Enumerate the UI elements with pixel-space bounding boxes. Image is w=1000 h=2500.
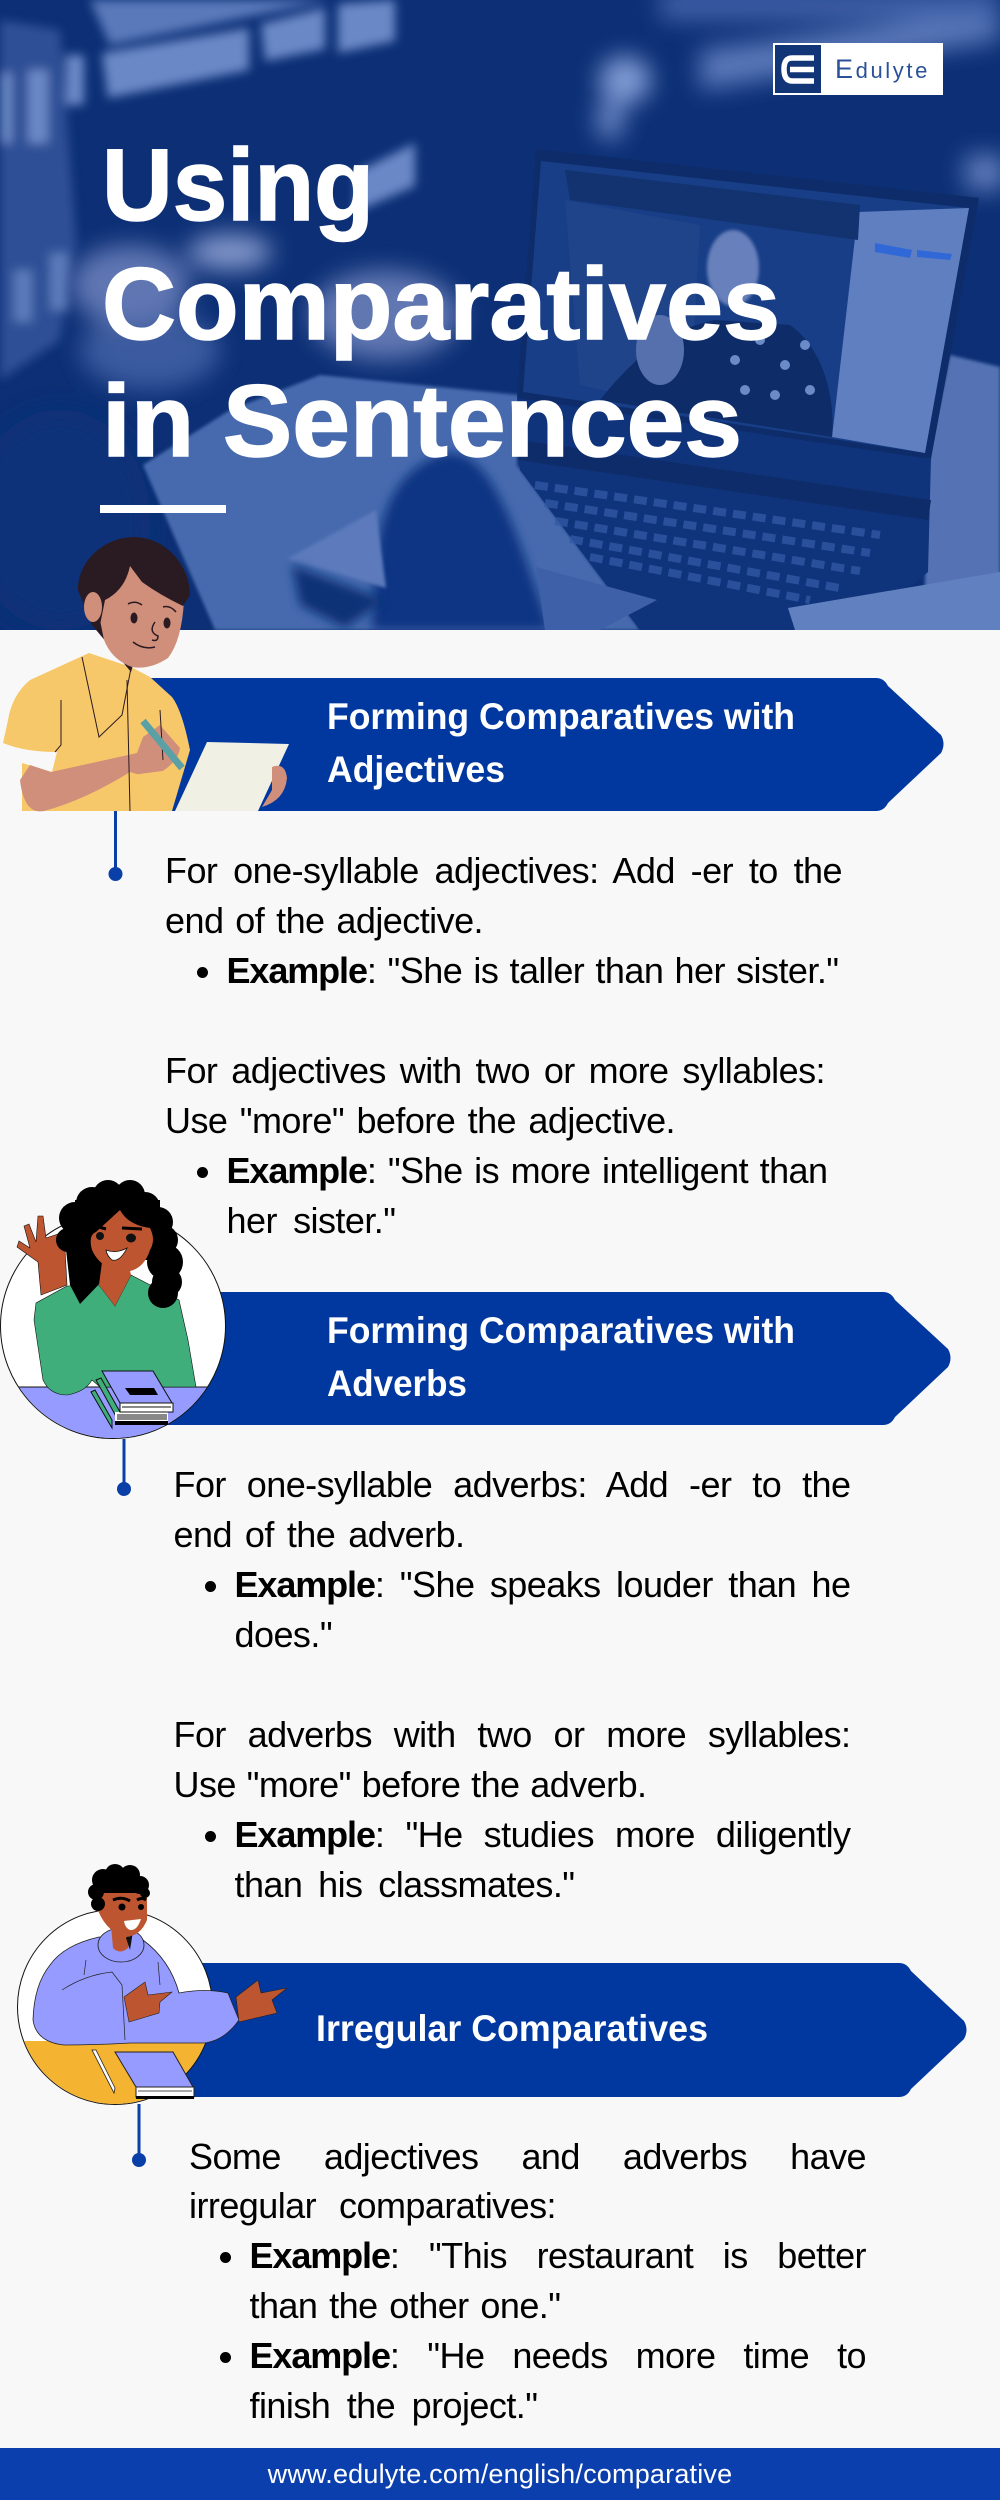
title: Using [102, 128, 374, 242]
head [92, 615, 136, 672]
connector 2 [117, 1439, 131, 1496]
title: in Sentences [102, 364, 742, 478]
text: finish the project." [250, 2385, 538, 2426]
text: For one-syllable adverbs: Add -er to the [174, 1464, 850, 1505]
text: irregular comparatives: [189, 2185, 556, 2226]
text: Example: "This restaurant is better [250, 2235, 866, 2276]
footer url bar [0, 2448, 1000, 2500]
text: adverbs section [174, 1464, 851, 1905]
hair [56, 1180, 183, 1308]
logo [773, 43, 943, 95]
book and pen [92, 2050, 115, 2093]
laptop [517, 149, 979, 630]
banner 3: Irregular Comparatives [316, 2008, 708, 2049]
text: adjectives section [165, 850, 842, 1241]
text: Example: "He needs more time to [250, 2335, 866, 2376]
connector 3 [132, 2104, 146, 2167]
paper [175, 742, 289, 811]
banner 3 [170, 1963, 966, 2097]
header photo background [0, 0, 1000, 630]
text: Example: "She speaks louder than he [234, 1564, 850, 1605]
text: does." [234, 1614, 332, 1655]
title: Comparatives [102, 247, 780, 361]
foreground dark person [372, 453, 550, 630]
illustration: man pointing [0, 1864, 287, 2111]
text: end of the adverb. [174, 1514, 464, 1555]
footer url bar: www.edulyte.com/english/comparative [268, 2459, 732, 2489]
text: Some adjectives and adverbs have [189, 2136, 866, 2177]
banner 2: Adverbs [327, 1363, 467, 1404]
table surface [143, 375, 640, 630]
banner 1 [140, 678, 944, 811]
text: Example: "She is taller than her sister." [226, 950, 838, 991]
banner 1: Adjectives [327, 749, 505, 790]
text: For adjectives with two or more syllables: [165, 1050, 825, 1091]
text: than his classmates." [234, 1864, 574, 1905]
text: her sister." [226, 1200, 396, 1241]
text: For adverbs with two or more syllables: [174, 1714, 850, 1755]
text: Example: "He studies more diligently [234, 1814, 850, 1855]
illustration: man writing [3, 537, 289, 811]
text: irregular section [189, 2136, 866, 2426]
text: For one-syllable adjectives: Add -er to the [165, 850, 842, 891]
title underline [100, 505, 226, 513]
illustration: woman waving [0, 1180, 226, 1447]
logo: Edulyte [835, 54, 930, 84]
connector 1 [108, 811, 122, 881]
books [96, 1378, 120, 1420]
title [102, 128, 780, 478]
text: Example: "She is more intelligent than [226, 1150, 828, 1191]
banner 2: Forming Comparatives with [327, 1310, 795, 1351]
text: than the other one." [250, 2285, 560, 2326]
banner 1: Forming Comparatives with [327, 696, 795, 737]
pen [143, 721, 182, 768]
banner 2 [150, 1292, 950, 1425]
text: Use "more" before the adjective. [165, 1100, 675, 1141]
text: end of the adjective. [165, 900, 483, 941]
text: Use "more" before the adverb. [174, 1764, 646, 1805]
keyboard [535, 485, 880, 600]
